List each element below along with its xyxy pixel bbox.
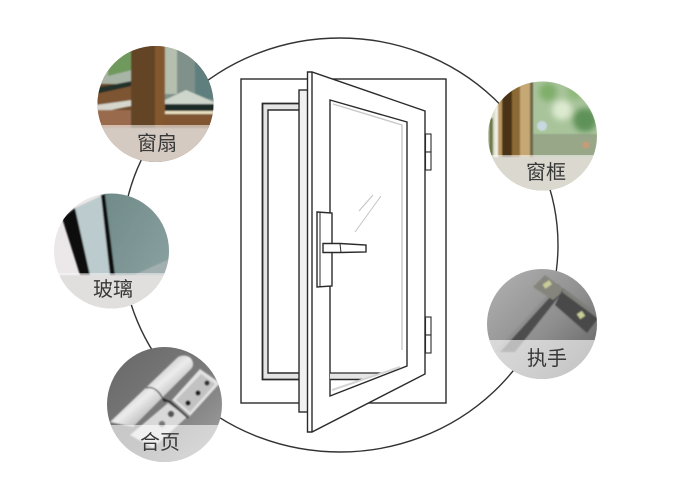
label: 执手: 执手 bbox=[527, 347, 567, 370]
handle bbox=[317, 212, 366, 287]
photo: 窗扇 sash bbox=[96, 44, 216, 165]
photo: 执手 handle bbox=[485, 267, 600, 381]
label: 合页: 合页 bbox=[140, 431, 180, 454]
large connecting circle bbox=[122, 38, 558, 452]
sash side strip bbox=[299, 90, 308, 412]
label: 窗框: 窗框 bbox=[526, 161, 566, 184]
outer window frame bbox=[241, 79, 446, 403]
label: 玻璃: 玻璃 bbox=[93, 278, 133, 301]
label band bbox=[492, 155, 594, 190]
photo: 合页 hinge bbox=[105, 345, 225, 465]
upper hinge bbox=[426, 134, 431, 170]
label band bbox=[58, 273, 164, 308]
label band bbox=[102, 125, 210, 162]
lower hinge bbox=[426, 317, 431, 353]
label band bbox=[490, 340, 594, 379]
label: 窗扇: 窗扇 bbox=[137, 132, 177, 155]
window diagram bbox=[241, 72, 446, 432]
photo: 玻璃 glass bbox=[52, 192, 172, 313]
photo: 窗框 frame bbox=[488, 82, 597, 190]
label band bbox=[111, 425, 218, 462]
inner frame opening bbox=[262, 104, 312, 380]
opened sash bbox=[308, 72, 425, 432]
glass reflection bbox=[355, 195, 381, 232]
